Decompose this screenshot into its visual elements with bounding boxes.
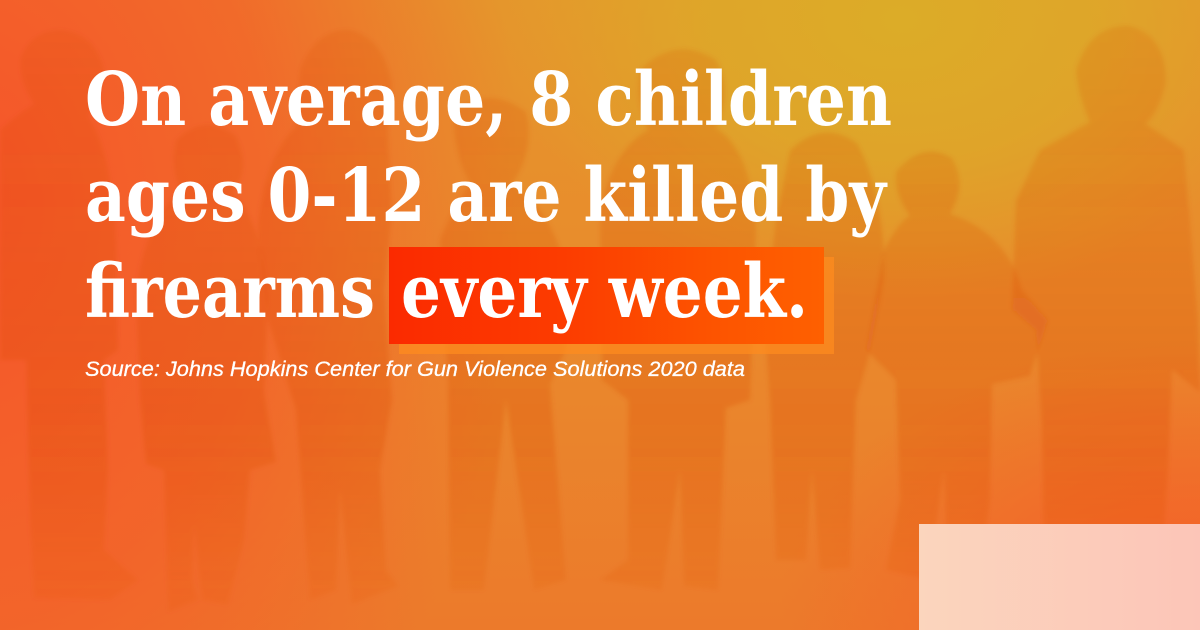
headline text xyxy=(85,57,892,335)
silhouette: child 5 xyxy=(600,49,756,590)
headline text: every week. xyxy=(401,249,808,335)
source line: Source: Johns Hopkins Center for Gun Violence Solutions 2020 data xyxy=(85,357,745,381)
silhouette: child 1 xyxy=(0,30,138,600)
highlight backing rectangle xyxy=(399,257,834,354)
highlight rectangle: every week xyxy=(389,247,824,344)
silhouette: child 8 xyxy=(1012,26,1200,570)
silhouette: child 3 xyxy=(258,30,398,604)
headline text: On average, 8 children xyxy=(85,57,892,143)
silhouette: child 6 xyxy=(764,132,884,570)
corner panel xyxy=(919,524,1200,630)
silhouette: child 7 xyxy=(866,152,1048,582)
headline text: ages 0-12 are killed by xyxy=(85,153,888,239)
silhouette: child 2 xyxy=(136,125,276,612)
headline text: firearms xyxy=(85,249,375,335)
silhouette: child 4 xyxy=(440,98,566,590)
